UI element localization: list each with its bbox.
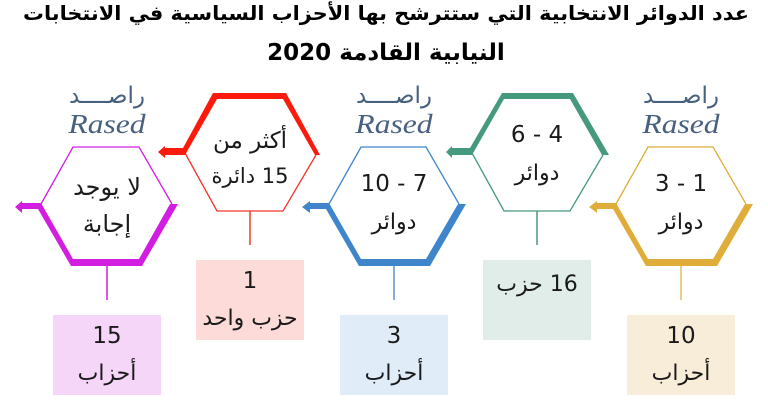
hexagon: no answer (magenta): إجابة — [83, 210, 131, 239]
box: 3 parties: أحزاب — [365, 358, 423, 386]
logo: Rased above third hexagon: راصــــد — [356, 83, 432, 109]
title: النيابية القادمة 2020 — [267, 40, 505, 66]
logo: Rased above first hexagon: راصــــد — [643, 83, 719, 109]
box: 10 parties: 10 — [666, 323, 696, 349]
connector: blue — [393, 266, 395, 300]
box: 1 party: حزب واحد — [202, 306, 298, 331]
connector: magenta — [106, 266, 108, 300]
box: 3 parties — [340, 315, 448, 395]
hexagon: 1-3 districts (yellow) — [589, 147, 753, 266]
hexagon: 4-6 districts (green): دوائر — [514, 161, 559, 186]
hexagon: more than 15 districts (red): 15 دائرة — [211, 164, 289, 188]
box: 3 parties: 3 — [387, 323, 401, 349]
hexagon: no answer (magenta) — [15, 147, 178, 266]
hexagon: 4-6 districts (green) — [446, 93, 609, 211]
box: 10 parties — [627, 315, 735, 395]
box: 15 parties: أحزاب — [78, 358, 136, 386]
hexagon: more than 15 districts (red) — [158, 93, 320, 211]
logo: Rased above fifth hexagon: راصــــد — [69, 83, 145, 109]
hexagon: 7-10 districts (blue) — [302, 147, 466, 266]
box: 10 parties: أحزاب — [652, 358, 710, 386]
box: 1 party: 1 — [243, 268, 257, 294]
hexagon: no answer (magenta): لا يوجد — [73, 173, 141, 201]
box: 15 parties — [53, 315, 161, 395]
box: 16 parties: 16 حزب — [496, 272, 578, 297]
box: 15 parties: 15 — [92, 323, 122, 349]
connector: yellow — [680, 266, 682, 300]
logo: Rased above first hexagon — [641, 83, 720, 139]
title: عدد الدوائر الانتخابية التي ستترشح بها الأحزاب السياسية في الانتخابات — [23, 1, 749, 26]
logo: Rased above first hexagon: Rased — [641, 110, 720, 139]
logo: Rased above third hexagon: Rased — [354, 110, 433, 139]
hexagon: 1-3 districts (yellow): دوائر — [658, 210, 703, 235]
hexagon: 4-6 districts (green): 4 - 6 — [511, 122, 563, 148]
connector: green — [536, 211, 538, 245]
box: 1 party — [196, 260, 304, 340]
connector: red — [249, 211, 251, 245]
box: 16 parties — [483, 260, 591, 340]
hexagon: 7-10 districts (blue): 7 - 10 — [361, 171, 427, 197]
hexagon: 1-3 districts (yellow): 1 - 3 — [655, 171, 707, 197]
logo: Rased above fifth hexagon: Rased — [67, 110, 146, 139]
hexagon: 7-10 districts (blue): دوائر — [371, 210, 416, 235]
title — [23, 1, 749, 66]
hexagon: more than 15 districts (red): أكثر من — [213, 125, 287, 154]
logo: Rased above fifth hexagon — [67, 83, 146, 139]
logo: Rased above third hexagon — [354, 83, 433, 139]
